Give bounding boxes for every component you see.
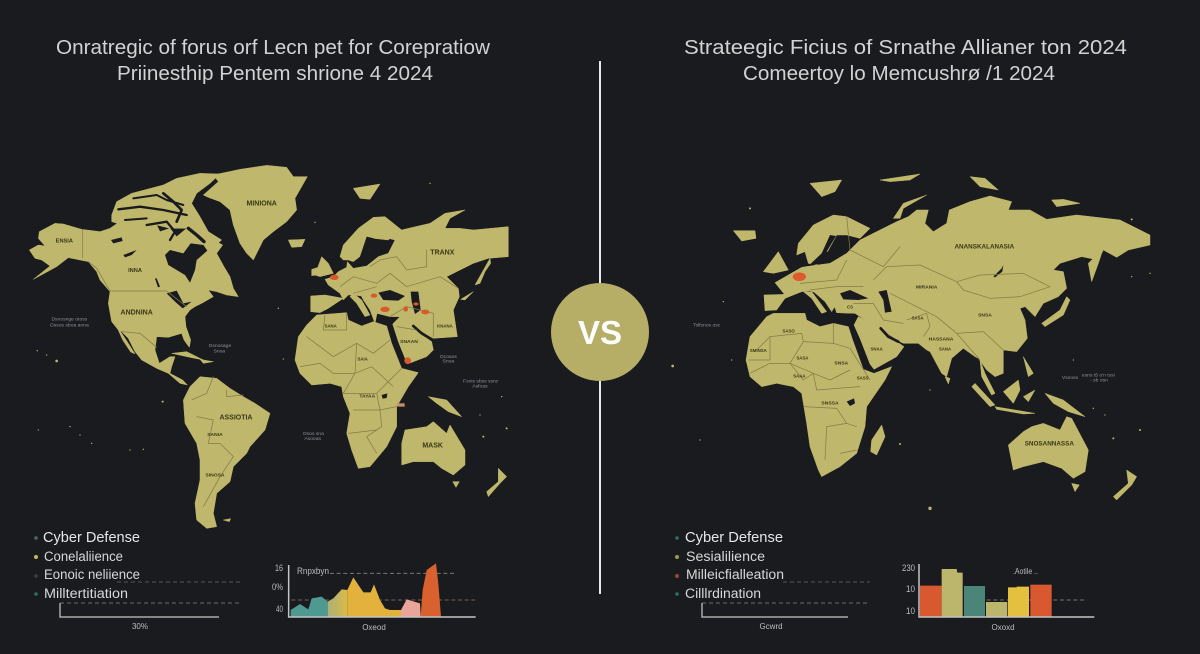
map: right Eurasia and Africa map: SASO bbox=[783, 328, 795, 333]
map: left world map: Dsnosage bbox=[209, 343, 231, 349]
map: right Eurasia and Africa map: Vsnoss bbox=[1062, 375, 1079, 381]
map: right Eurasia and Africa map bbox=[671, 174, 1151, 510]
map: right Eurasia and Africa map: SNSA bbox=[978, 312, 992, 318]
bar chart: right: .Aotile .. bbox=[1013, 567, 1038, 576]
map: right Eurasia and Africa map: HASSANA bbox=[929, 337, 954, 343]
small axis: right bbox=[702, 582, 870, 631]
map: right Eurasia and Africa map: CS bbox=[847, 304, 853, 309]
map: right Eurasia and Africa map: SNSSA bbox=[821, 400, 839, 406]
divider line bbox=[599, 61, 601, 594]
legend: left: Cyber Defense bbox=[43, 530, 140, 546]
small axis: left: 30% bbox=[132, 622, 148, 631]
map: left world map: Ossos sboa anna bbox=[50, 322, 89, 328]
map: right Eurasia and Africa map: MIRANIA bbox=[916, 285, 938, 291]
map: left world map: Asooas bbox=[304, 436, 321, 442]
map: right Eurasia and Africa map: SANA bbox=[939, 346, 952, 351]
legend: left: Eonoic neliience bbox=[44, 567, 140, 582]
map: left world map: TRANX bbox=[430, 250, 455, 257]
bar chart: right: 10 bbox=[906, 584, 915, 594]
map: left world map: INNA bbox=[128, 268, 142, 274]
legend: left bbox=[34, 530, 140, 601]
map: left world map: SINOSA bbox=[205, 473, 225, 479]
map: left world map: SAIA bbox=[357, 357, 369, 362]
area chart: left bbox=[272, 563, 476, 632]
area chart: left: Oxeod bbox=[362, 623, 386, 632]
map: left world map: ANDNINA bbox=[121, 309, 153, 316]
legend: right bbox=[675, 530, 784, 601]
map: right Eurasia and Africa map: SASA bbox=[912, 315, 925, 320]
bar chart: right: 230 bbox=[902, 563, 915, 573]
map: right Eurasia and Africa map: Tslfsnos osc bbox=[693, 323, 721, 329]
map: left world map: Dsnosnge otoss bbox=[51, 317, 88, 323]
legend: right: Milleicfialleation bbox=[686, 567, 784, 582]
area chart: left: Rnpxbyn bbox=[297, 566, 329, 576]
map: right Eurasia and Africa map: SASS bbox=[857, 375, 869, 380]
title: left bbox=[56, 36, 490, 85]
map: left world map: ENSIA bbox=[56, 238, 73, 244]
title: left: Onratregic of forus orf Lecn pet for Corepratiow bbox=[56, 36, 490, 59]
map: right Eurasia and Africa map: SASA bbox=[796, 355, 809, 360]
map: right Eurasia and Africa map: - sb osn bbox=[1090, 378, 1108, 384]
bar chart: right: 10 bbox=[906, 606, 915, 616]
map: right Eurasia and Africa map: SNSA bbox=[834, 360, 849, 366]
legend: right: Sesialilience bbox=[686, 549, 765, 564]
title: right bbox=[684, 36, 1127, 85]
map: left world map: SANA bbox=[325, 324, 338, 329]
map: left world map: SNAAN bbox=[400, 339, 418, 345]
map: right Eurasia and Africa map: SMINSA bbox=[750, 348, 768, 353]
map: left world map: Snoa bbox=[443, 359, 454, 365]
title: left: Priinesthip Pentem shrione 4 2024 bbox=[117, 62, 433, 85]
map: left world map: ASSIOTIA bbox=[219, 414, 252, 421]
legend: right: Cyber Defense bbox=[685, 530, 783, 546]
map: left world map: SANIA bbox=[207, 432, 223, 438]
area chart: left: 40 bbox=[276, 604, 283, 614]
bar chart: right bbox=[902, 563, 1094, 632]
small axis: right: Gcwrd bbox=[759, 622, 783, 631]
map: right Eurasia and Africa map: SAAA bbox=[793, 373, 806, 378]
small axis: left bbox=[60, 582, 240, 631]
title: right: Comeertoy lo Memcushrø /1 2024 bbox=[743, 62, 1055, 85]
map: left world map: Ocoaos bbox=[440, 354, 457, 360]
map: left world map: TAYAA bbox=[359, 393, 376, 399]
legend: right: Cilllrdination bbox=[685, 586, 761, 601]
map: left world map: Osos sna bbox=[303, 431, 324, 437]
map: left world map: Asfoas bbox=[472, 383, 488, 389]
map: right Eurasia and Africa map: SNOSANNASSA bbox=[1025, 441, 1074, 448]
title: right: Strateegic Ficius of Srnathe Allianer ton 2024 bbox=[684, 36, 1127, 59]
map: left world map: Snoa bbox=[214, 348, 225, 354]
map: right Eurasia and Africa map: esns t5 o'n tssi bbox=[1082, 372, 1115, 378]
legend: left: Conelaliience bbox=[44, 549, 123, 564]
map: left world map: Fsnis sbss ssnz bbox=[463, 378, 499, 384]
map: left world map: MASK bbox=[422, 442, 443, 449]
bar chart: right: Oxoxd bbox=[991, 623, 1015, 632]
area chart: left: 16 bbox=[275, 563, 283, 573]
badge: VS bbox=[551, 283, 649, 381]
map: left world map: MINIONA bbox=[247, 201, 277, 208]
map: left world map bbox=[29, 165, 508, 528]
area chart: left: 0% bbox=[272, 582, 283, 592]
map: right Eurasia and Africa map: ANANSKALANASIA bbox=[954, 243, 1015, 250]
badge: VS: VS bbox=[578, 314, 622, 351]
map: right Eurasia and Africa map: SNAA bbox=[871, 347, 884, 352]
legend: left: Milltertitiation bbox=[44, 586, 128, 601]
map: left world map: KNANA bbox=[437, 324, 454, 329]
